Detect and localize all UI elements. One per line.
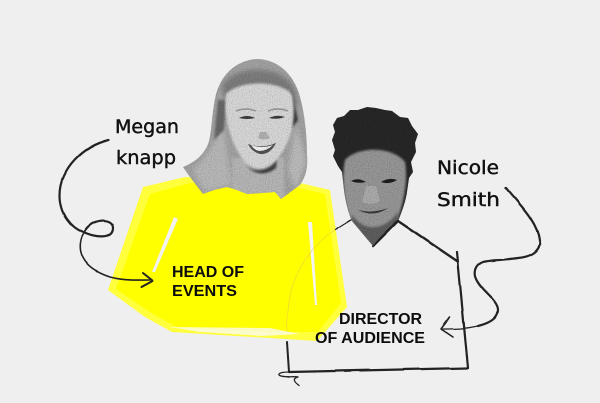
Nicole Smith shirt outline xyxy=(279,220,468,385)
name: Nicole Smith: Smith xyxy=(437,189,500,211)
label: Head of Events: EVENTS xyxy=(172,283,237,300)
label: Director of Audience xyxy=(315,311,425,347)
white brush streak left xyxy=(152,217,178,272)
name: Megan Knapp: knapp xyxy=(116,147,176,169)
name: Nicole Smith: Nicole xyxy=(437,157,499,179)
label: Head of Events: HEAD OF xyxy=(172,264,244,281)
facial features xyxy=(236,109,288,154)
white brush streak right xyxy=(308,222,317,305)
panel: Megan Knapp yellow shirt xyxy=(108,177,347,341)
white brush streak bottom xyxy=(170,327,300,336)
label: Head of Events xyxy=(172,264,244,300)
name: Megan Knapp: Megan xyxy=(115,116,179,138)
label: Director of Audience: OF AUDIENCE xyxy=(315,330,425,347)
arrow: Nicole to role xyxy=(441,188,540,337)
arrow: Megan to role xyxy=(60,140,153,287)
photo: Megan Knapp xyxy=(180,55,310,203)
facial features xyxy=(351,179,397,214)
photo: Nicole Smith xyxy=(332,107,418,246)
label: Director of Audience: DIRECTOR xyxy=(339,311,422,328)
name: Nicole Smith xyxy=(437,157,500,211)
name: Megan Knapp xyxy=(115,116,179,169)
